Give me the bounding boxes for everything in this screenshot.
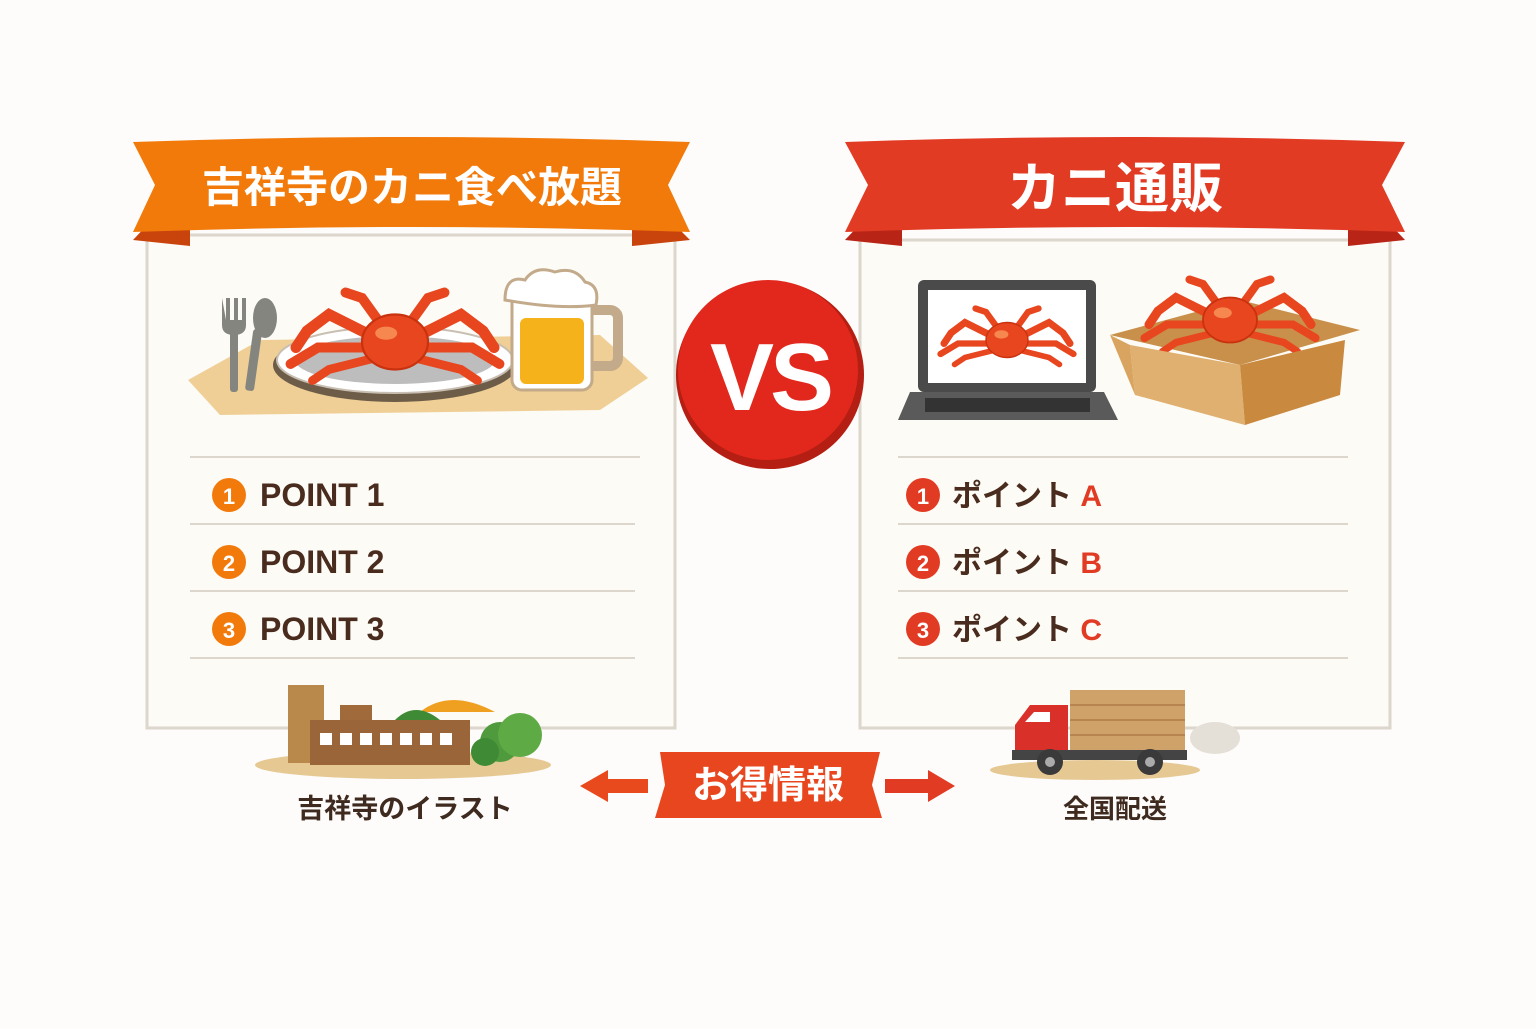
arrow: right — [885, 770, 955, 802]
ribbon: deal info: お得情報 — [692, 765, 844, 807]
ribbon: right title: カニ通販 — [1007, 159, 1223, 219]
arrow: left — [580, 770, 648, 802]
list: left points: POINT 2 — [260, 544, 384, 580]
list: right points: ポイント C — [952, 614, 1102, 647]
ribbon: left title — [133, 137, 690, 246]
ribbon: left title: 吉祥寺のカニ食べ放題 — [202, 164, 622, 211]
list: right points — [898, 457, 1348, 658]
list: right points: ポイント A — [952, 480, 1102, 513]
list: left points: POINT 1 — [260, 477, 384, 513]
VS badge — [676, 280, 864, 469]
panel: left card — [133, 137, 690, 728]
list: left points — [190, 457, 640, 658]
panel: right card — [845, 137, 1405, 728]
ribbon: deal info — [655, 752, 882, 818]
list: right points: 3 — [917, 618, 929, 643]
list: right points: 1 — [917, 484, 929, 509]
caption: nationwide delivery: 全国配送 — [1063, 794, 1167, 824]
list: left points: 3 — [223, 618, 235, 643]
list: left points: 2 — [223, 551, 235, 576]
caption: kichijoji: 吉祥寺のイラスト — [297, 794, 513, 824]
icon: laptop and crab box — [898, 280, 1360, 425]
icon: kichijoji illustration — [255, 685, 551, 779]
list: left points: 1 — [223, 484, 235, 509]
ribbon: right title — [845, 137, 1405, 246]
icon: crab dinner — [188, 270, 648, 415]
list: right points: 2 — [917, 551, 929, 576]
list: right points: ポイント B — [952, 547, 1102, 580]
icon: delivery truck — [990, 690, 1240, 780]
VS badge: VS — [710, 324, 831, 431]
list: left points: POINT 3 — [260, 611, 384, 647]
